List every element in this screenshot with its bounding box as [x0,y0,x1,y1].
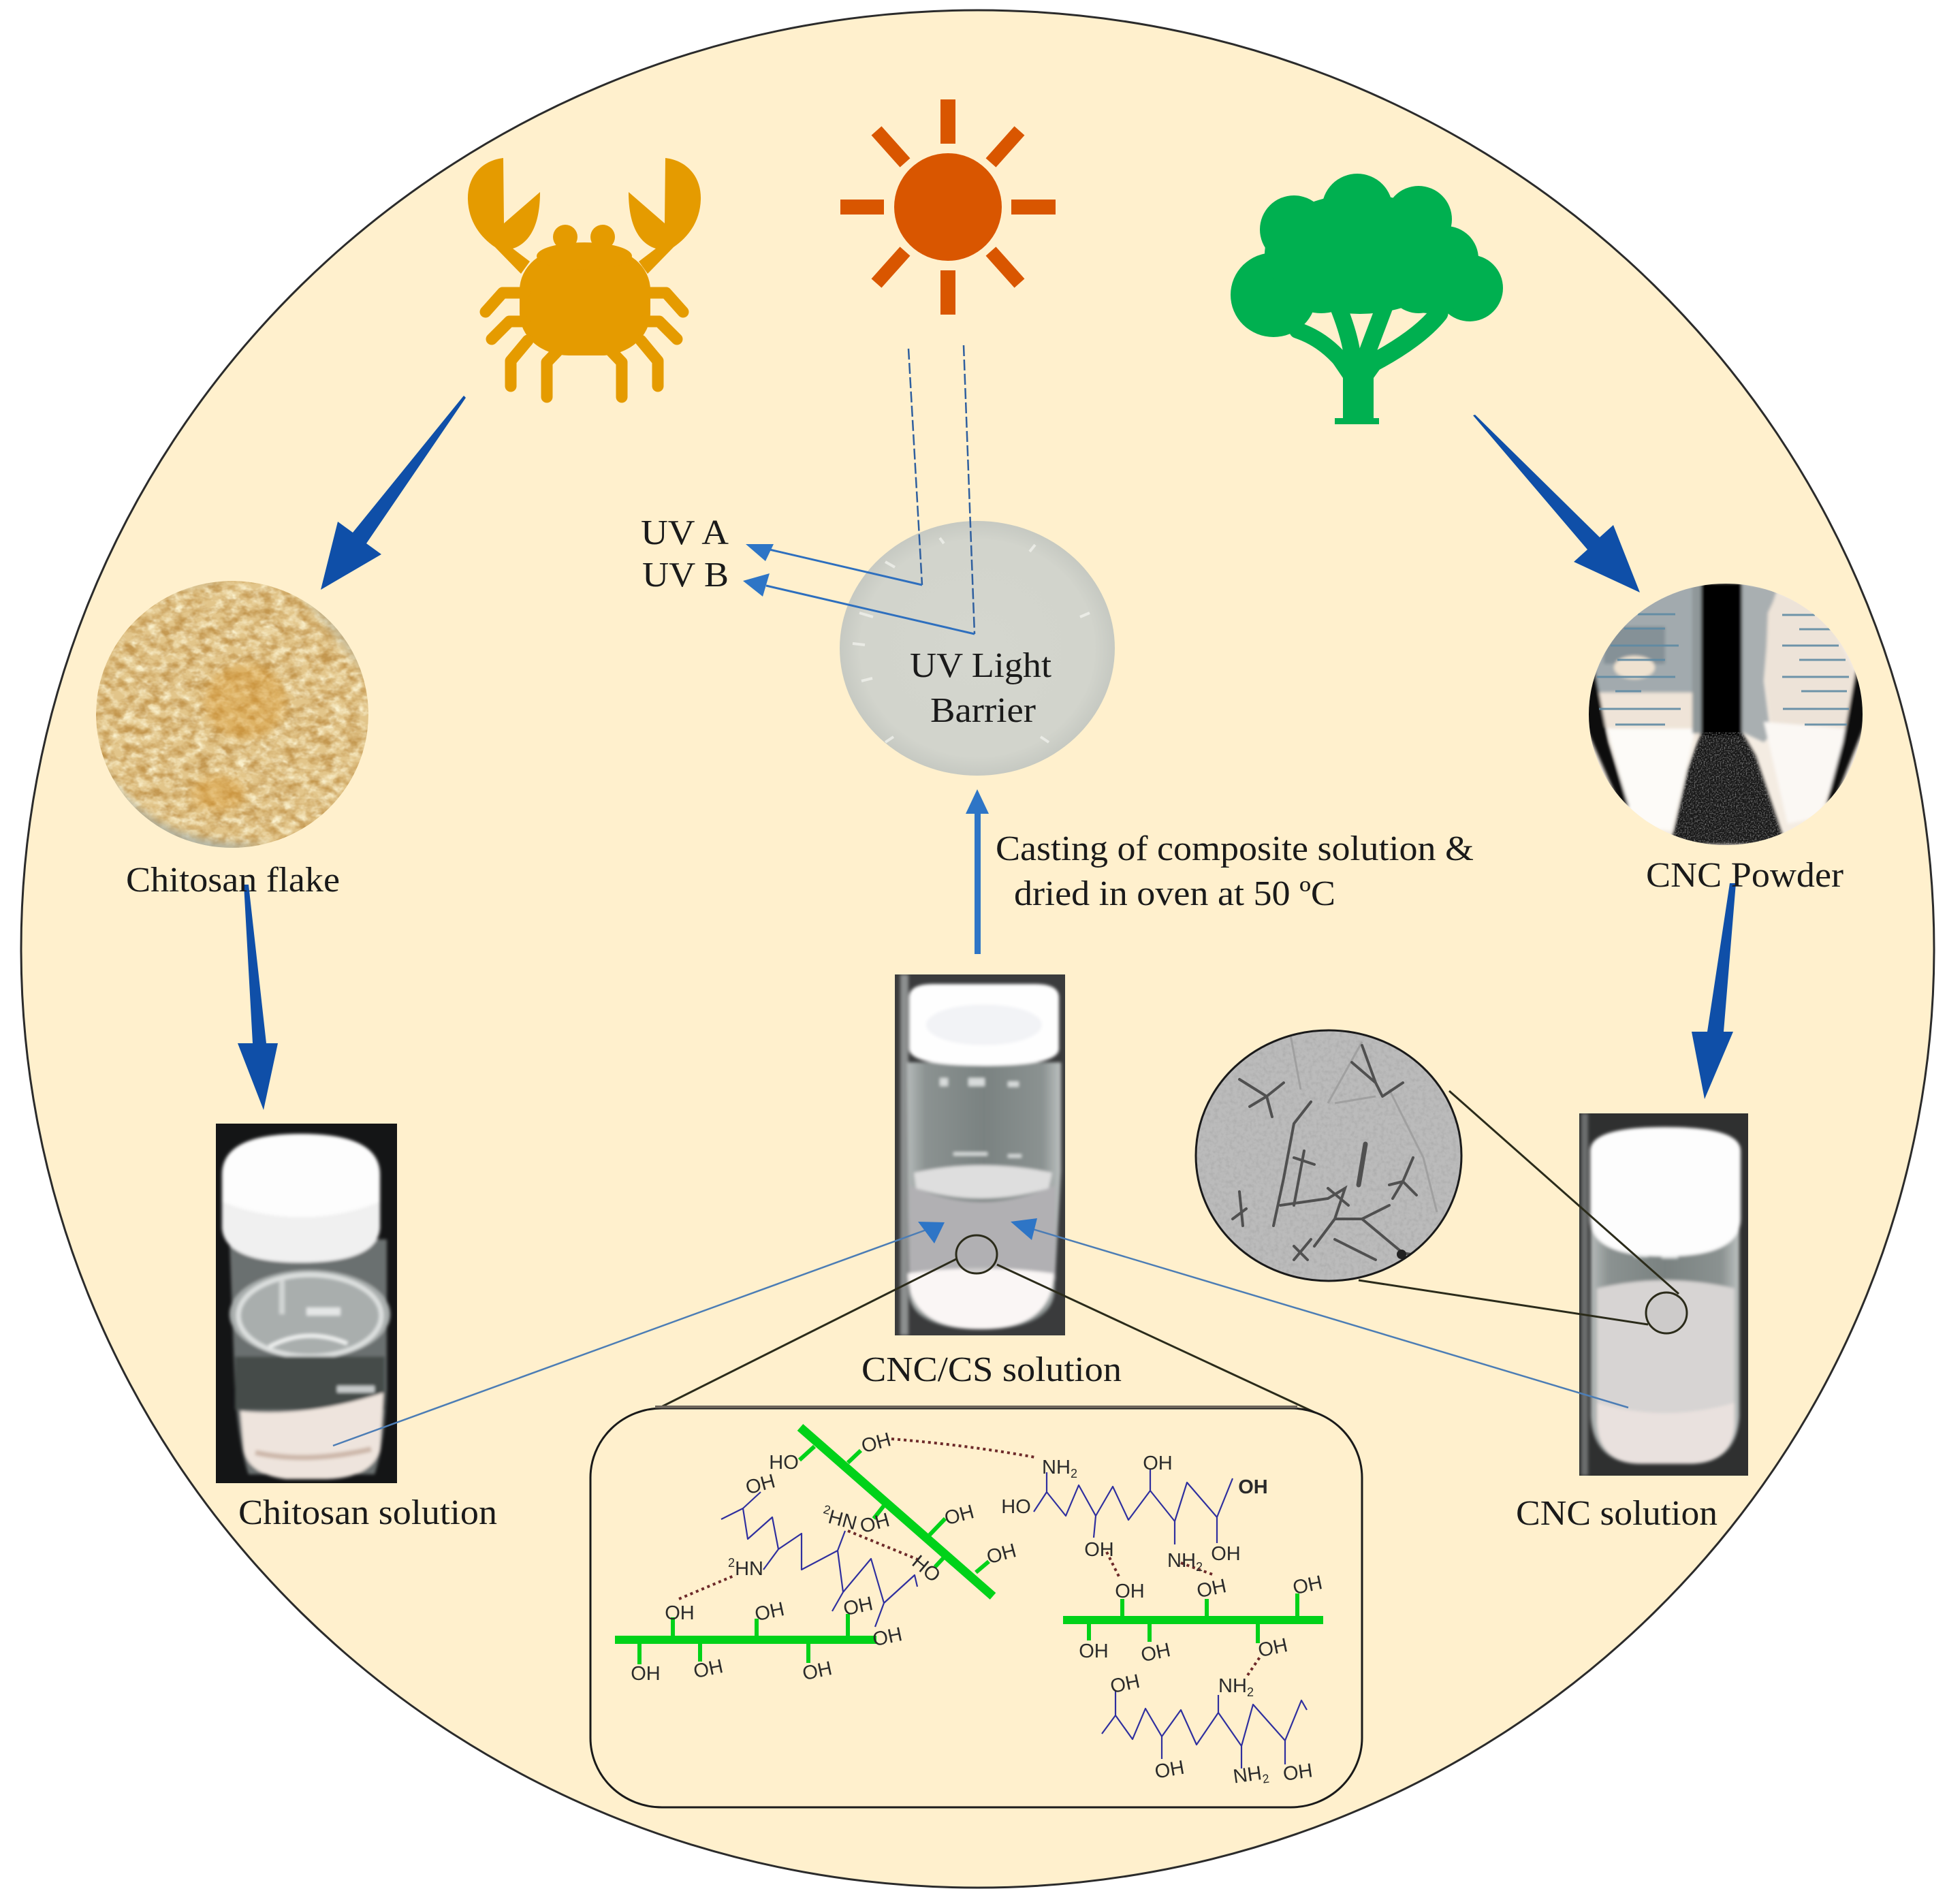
functional group labels: OH [858,1509,892,1538]
functional group labels: OH [801,1657,834,1685]
functional group labels: OH [1256,1634,1290,1662]
functional group labels: 2 [822,1502,832,1517]
functional group labels: OH [1282,1760,1314,1786]
arrow: crab to chitosan flake [321,396,466,590]
label: chitosan solution: Chitosan solution [238,1493,497,1532]
photo: UV barrier film disc [840,521,1115,776]
label: casting step: dried in oven at 50 ºC [1014,874,1335,913]
functional group labels: OH [665,1602,695,1624]
icon: crab [468,158,701,397]
functional group labels: OH [1153,1757,1186,1783]
functional group labels: OH [871,1623,904,1651]
functional group labels: OH [1079,1640,1109,1662]
chitosan chains [721,1470,1307,1768]
functional group labels: OH [1211,1543,1241,1565]
callout: CNC solution to TEM [1359,1091,1687,1333]
functional group labels: NH [1218,1675,1247,1697]
label: casting step: Casting of composite solution & [996,829,1474,868]
functional group labels: OH [692,1655,725,1683]
arrow: UV A reflected [746,544,922,585]
UV rays: dashed lines from sun to film [908,345,975,634]
functional group labels: HO [908,1551,945,1587]
functional group labels: HO [1001,1496,1031,1518]
label: chitosan flake: Chitosan flake [126,861,340,900]
photo: CNC solution vial [1579,1113,1748,1476]
functional group labels: OH [1143,1453,1173,1474]
arrow: CNC powder to CNC solution [1692,883,1736,1099]
functional group labels: HO [769,1452,799,1474]
functional group labels: OH [943,1501,977,1529]
arrow: CNC solution into composite [1011,1218,1628,1408]
photo: chitosan flake [96,581,368,848]
label: UV A: UV A [641,513,729,552]
arrow: chitosan solution into composite [333,1222,945,1446]
functional group labels: OH [631,1663,661,1685]
functional group labels: OH [1291,1572,1325,1599]
functional group labels: HN [826,1506,859,1534]
label: CNC/CS solution: CNC/CS solution [861,1350,1122,1389]
functional group labels: NH [1232,1762,1263,1788]
functional group labels: NH [1042,1457,1071,1478]
functional group labels: 2 [1261,1771,1270,1786]
functional group labels: OH [1109,1670,1142,1698]
label: CNC solution: CNC solution [1516,1494,1718,1533]
arrow: UV B reflected [743,573,975,634]
panel: molecular interaction schematic [590,1407,1362,1807]
TEM circle outline [1196,1030,1461,1281]
cellulose chains [615,1427,1323,1664]
functional group labels: OH [1139,1639,1173,1666]
icon: sun [840,99,1056,315]
functional group labels: OH [753,1598,787,1625]
functional group labels: HN [735,1558,763,1580]
callout: CNC/CS solution to molecular schematic [656,1235,1319,1414]
hydrogen bonds [679,1439,1261,1675]
functional group labels: OH [859,1429,893,1457]
functional group labels: 2 [1071,1467,1077,1480]
icon: tree [1231,174,1503,424]
functional group labels [631,1429,1325,1790]
label: UV B: UV B [642,556,729,594]
functional group labels: OH [985,1540,1019,1568]
label: UV Light Barrier: UV Light [910,646,1052,685]
photo: chitosan solution vial [216,1124,397,1483]
functional group labels: OH [1195,1575,1229,1602]
arrow: tree to CNC powder [1473,415,1640,592]
functional group labels: NH [1167,1550,1196,1572]
functional group labels: 2 [1247,1685,1254,1699]
TEM image of cellulose nanocrystals [1196,1030,1461,1281]
functional group labels: 2 [1196,1560,1203,1574]
functional group labels: OH [744,1470,778,1499]
arrow: chitosan flake to chitosan solution [238,885,278,1110]
functional group labels: OH [842,1593,875,1620]
functional group labels: 2 [728,1556,735,1570]
functional group labels: OH [1084,1539,1114,1561]
photo: CNC powder tubes [1583,582,1866,846]
photo: CNC/CS solution vial [895,974,1065,1335]
arrow: casting up to film [966,789,989,954]
functional group labels: OH [1115,1581,1145,1602]
label: UV Light Barrier: Barrier [930,691,1036,730]
functional group labels: OH [1238,1476,1268,1498]
label: CNC powder: CNC Powder [1646,856,1843,895]
